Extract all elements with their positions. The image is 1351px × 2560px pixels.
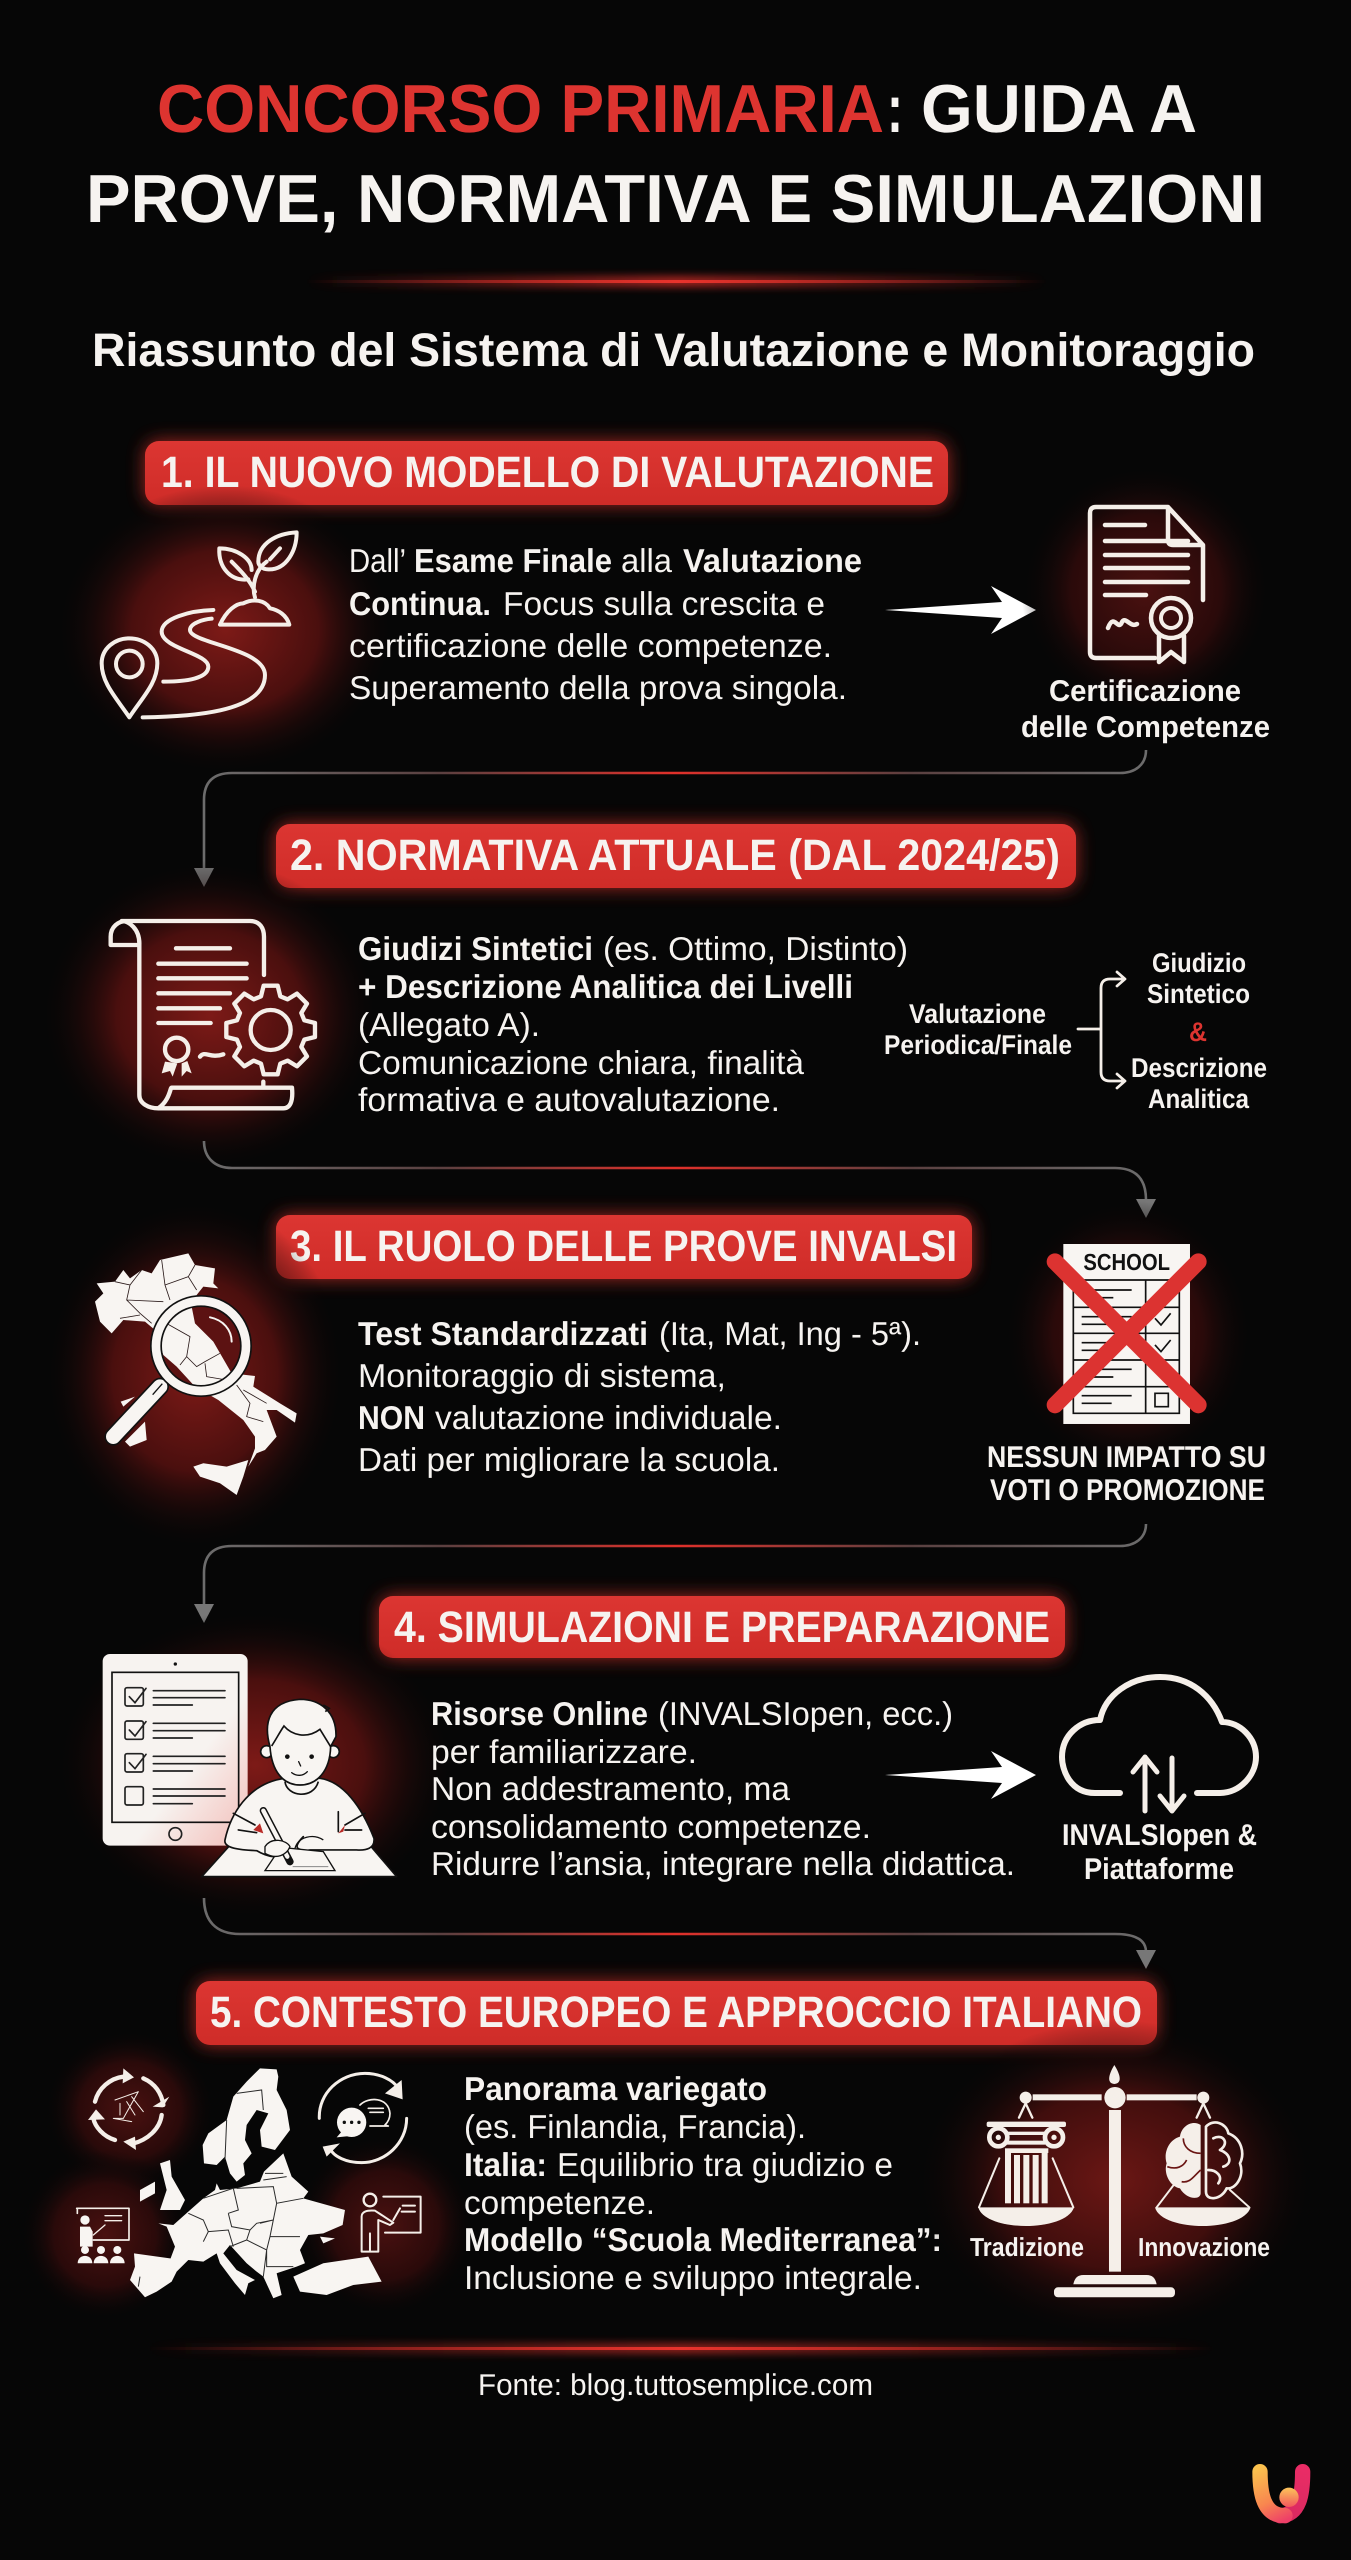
diagram outcome labels: Giudizio bbox=[1152, 948, 1246, 978]
icon: path to growth bbox=[55, 485, 395, 775]
section 2 heading badge: 2. NORMATIVA ATTUALE (DAL 2024/25) bbox=[290, 831, 1060, 880]
title bbox=[86, 71, 1265, 237]
section 2 text: Giudizi Sintetici bbox=[358, 930, 593, 967]
icon: certificate document bbox=[1021, 465, 1271, 715]
connector arrow 4 to 5 bbox=[204, 1898, 1156, 1969]
title: GUIDA A bbox=[921, 71, 1197, 147]
section 3 text: Test Standardizzati bbox=[358, 1315, 648, 1352]
section 1 panel bbox=[55, 441, 1271, 775]
section 1 text: Continua. bbox=[349, 585, 491, 622]
column of tradition bbox=[978, 2122, 1074, 2226]
icon: cloud with sync arrows bbox=[1062, 1677, 1256, 1811]
section 4 text: Ridurre l’ansia, integrare nella didattica. bbox=[431, 1845, 1015, 1882]
diagram source label bbox=[884, 999, 1072, 1060]
section 3 text: valutazione individuale. bbox=[435, 1399, 782, 1436]
section 3 text: Monitoraggio di sistema, bbox=[358, 1357, 726, 1394]
connector arrow 1 to 2 bbox=[194, 750, 1146, 887]
section 3 text bbox=[358, 1315, 921, 1478]
section 4 panel bbox=[55, 1596, 1257, 1920]
no-impact caption bbox=[987, 1441, 1266, 1507]
platforms caption: Piattaforme bbox=[1084, 1853, 1234, 1886]
section 3 text: (Ita, Mat, Ing - 5ª). bbox=[659, 1315, 921, 1352]
section 2 text: (es. Ottimo, Distinto) bbox=[603, 930, 908, 967]
diagram outcome labels: Sintetico bbox=[1147, 979, 1250, 1009]
scale labels: Tradizione bbox=[970, 2232, 1084, 2262]
section 4 text bbox=[431, 1695, 1015, 1882]
section 5 text: Italia: bbox=[464, 2146, 547, 2183]
icon: balance scale tradition versus innovation bbox=[915, 2020, 1315, 2340]
arrow to platforms bbox=[885, 1751, 1036, 1799]
icon: Italy map with magnifier bbox=[68, 1227, 322, 1522]
icon: scroll with gear bbox=[40, 860, 380, 1170]
section 1 text: Dall’ bbox=[349, 542, 406, 579]
no-impact caption: VOTI O PROMOZIONE bbox=[990, 1474, 1265, 1507]
scale labels bbox=[970, 2232, 1270, 2262]
connector arrow 3 to 4 bbox=[194, 1524, 1146, 1623]
icon: crossed-out school report bbox=[1003, 1200, 1253, 1470]
section 1 text: Superamento della prova singola. bbox=[349, 669, 847, 706]
diagram source label: Periodica/Finale bbox=[884, 1030, 1072, 1060]
section 5 heading badge bbox=[196, 1981, 1157, 2045]
diagram outcome labels: Descrizione bbox=[1131, 1053, 1267, 1083]
diagram outcome labels: Analitica bbox=[1148, 1084, 1250, 1114]
section 1 text: certificazione delle competenze. bbox=[349, 627, 832, 664]
certification caption: Certificazione bbox=[1049, 675, 1241, 708]
diagram outcome labels bbox=[1131, 948, 1267, 1114]
section 1 text: Focus sulla crescita e bbox=[503, 585, 825, 622]
section 5 text bbox=[464, 2070, 942, 2296]
section 5 text: Inclusione e sviluppo integrale. bbox=[464, 2259, 922, 2296]
section 5 panel bbox=[20, 1981, 1315, 2340]
section 1 heading badge bbox=[145, 441, 948, 505]
section 4 text: Risorse Online bbox=[431, 1695, 648, 1732]
section 1 text: Valutazione bbox=[683, 542, 862, 579]
section 3 heading badge bbox=[276, 1215, 972, 1279]
section 2 text bbox=[358, 930, 908, 1118]
diagram source label: Valutazione bbox=[909, 999, 1046, 1029]
title divider bbox=[306, 276, 1047, 287]
section 1 heading badge: 1. IL NUOVO MODELLO DI VALUTAZIONE bbox=[161, 448, 934, 497]
title: PROVE, NORMATIVA E SIMULAZIONI bbox=[86, 161, 1265, 237]
diagram outcome labels: & bbox=[1189, 1017, 1207, 1047]
certification caption: delle Competenze bbox=[1021, 711, 1270, 744]
section 1 text bbox=[349, 542, 862, 706]
section 3 heading badge: 3. IL RUOLO DELLE PROVE INVALSI bbox=[290, 1222, 957, 1271]
section 2 text: + Descrizione Analitica dei Livelli bbox=[358, 968, 853, 1005]
section 5 text: Panorama variegato bbox=[464, 2070, 767, 2107]
platforms caption: INVALSIopen & bbox=[1062, 1819, 1257, 1852]
section 4 text: per familiarizzare. bbox=[431, 1733, 697, 1770]
section 4 text: consolidamento competenze. bbox=[431, 1808, 871, 1845]
scale labels: Innovazione bbox=[1138, 2232, 1270, 2262]
subtitle: Riassunto del Sistema di Valutazione e Monitoraggio bbox=[92, 323, 1255, 376]
diagram: evaluation branches bbox=[884, 948, 1267, 1114]
section 1 text: alla bbox=[621, 542, 673, 579]
icon: Europe map with surrounding icons bbox=[20, 2030, 475, 2320]
platforms caption bbox=[1062, 1819, 1257, 1886]
brain of innovation bbox=[1155, 2122, 1251, 2226]
section 4 text: (INVALSIopen, ecc.) bbox=[658, 1695, 953, 1732]
section 5 text: Modello “Scuola Mediterranea”: bbox=[464, 2221, 942, 2258]
certification caption bbox=[1021, 675, 1270, 744]
section 3 panel bbox=[68, 1202, 1264, 1522]
connector arrow 2 to 3 bbox=[204, 1141, 1156, 1218]
section 5 text: competenze. bbox=[464, 2184, 655, 2221]
section 3 text: NON bbox=[358, 1399, 425, 1436]
source line: Fonte: blog.tuttosemplice.com bbox=[478, 2369, 873, 2402]
section 3 text: Dati per migliorare la scuola. bbox=[358, 1441, 780, 1478]
section 1 text: Esame Finale bbox=[414, 542, 612, 579]
title: CONCORSO PRIMARIA bbox=[157, 71, 884, 147]
section 4 heading badge: 4. SIMULAZIONI E PREPARAZIONE bbox=[394, 1603, 1050, 1652]
no-impact caption: NESSUN IMPATTO SU bbox=[987, 1441, 1266, 1474]
section 5 text: (es. Finlandia, Francia). bbox=[464, 2108, 806, 2145]
arrow to certification bbox=[885, 586, 1036, 634]
branch bracket bbox=[1078, 972, 1125, 1088]
icon: crossed-out school report: SCHOOL bbox=[1083, 1249, 1170, 1275]
section 2 panel bbox=[40, 824, 1267, 1170]
section 4 text: Non addestramento, ma bbox=[431, 1770, 791, 1807]
logo bbox=[1260, 2472, 1303, 2516]
footer divider bbox=[147, 2343, 1215, 2354]
section 5 heading badge: 5. CONTESTO EUROPEO E APPROCCIO ITALIANO bbox=[210, 1988, 1142, 2037]
section 5 text: Equilibrio tra giudizio e bbox=[557, 2146, 893, 2183]
section 2 text: formativa e autovalutazione. bbox=[358, 1081, 780, 1118]
icon: tablet checklist and student bbox=[55, 1610, 455, 1920]
section 2 text: (Allegato A). bbox=[358, 1006, 540, 1043]
title: : bbox=[887, 71, 903, 147]
section 2 text: Comunicazione chiara, finalità bbox=[358, 1044, 805, 1081]
